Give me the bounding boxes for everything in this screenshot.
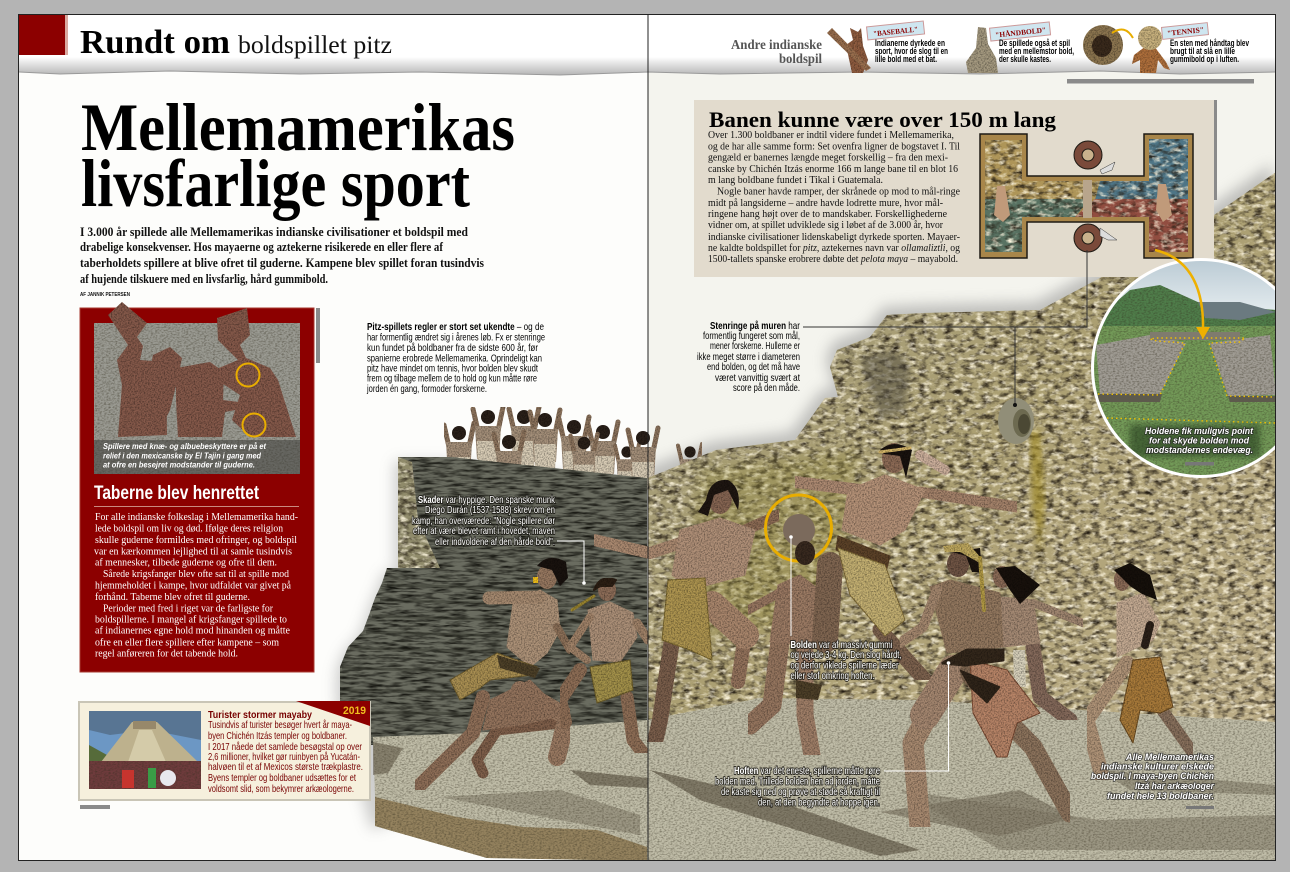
panel body text: indianske civilisationer lidenskabeligt dyrkede sporten. Mayaer- — [708, 232, 960, 243]
caption: ball courts in Chichén Itzá: Alle Mellemamerikas — [1125, 752, 1214, 763]
panel body text: Perioder med fred i riget var de farligste for — [103, 604, 273, 615]
callout: stone rings: Stenringe på muren har — [710, 320, 800, 332]
text: baseball — [875, 38, 948, 65]
caption: ball courts in Chichén Itzá: boldspil. I maya-byen Chichén — [1091, 771, 1214, 782]
callout: injuries: efter at være blevet ramt i hovedet, maven — [413, 525, 555, 537]
intro text — [80, 225, 484, 286]
panel body text: ringene hang højt over de to mandskaber. Forskellighederne — [708, 209, 947, 220]
photo caption: for at skyde bolden mod — [1149, 436, 1249, 446]
panel body text: vidner om, at spillet udviklede sig i løbet af de 3.000 år, hvor — [708, 220, 943, 231]
panel body text: ofre en eller flere spillere efter kampene – som — [95, 638, 279, 649]
box body text: Byens templer og boldbaner udsættes for et — [208, 772, 356, 784]
text: tennis: brugt til at slå en lille — [1170, 46, 1235, 57]
panel: other ball games — [731, 21, 1249, 73]
icon: stone ring on the wall — [998, 398, 1034, 444]
panel body text — [94, 512, 298, 660]
text: pitz rules: spanierne erobrede Mellemamerika. Oprindeligt kan — [367, 353, 542, 365]
box body text: halvøen til et af Mexicos største trækplastre. — [208, 761, 363, 773]
text: tennis — [1170, 38, 1249, 65]
intro text: drabelige konsekvenser. Hos mayaerne og aztekerne risikerede en eller flere af — [80, 240, 444, 254]
photo caption — [1145, 426, 1254, 456]
photo marker bar — [1185, 462, 1214, 466]
text: pitz rules: har formentlig ændret sig i årenes løb. Fx er stenringe — [367, 332, 545, 344]
heading: other games — [731, 38, 822, 67]
box heading: Turister stormer mayaby — [208, 709, 312, 721]
photo caption: Holdene fik muligvis point — [1145, 426, 1254, 437]
panel body text: og de har alle samme form: Set ovenfra ligner de bogstavet I. Til — [708, 142, 960, 153]
heading: other games: boldspil — [779, 52, 822, 67]
main title: Mellemamerikas — [81, 89, 515, 165]
callout: injuries: Skader var hyppige. Den spanske munk — [418, 494, 556, 506]
box body text: Tusindvis af turister besøger hvert år maya- — [208, 719, 352, 731]
text: baseball: lille bold med et bat. — [875, 54, 937, 65]
heading: other games: Andre indianske — [731, 38, 822, 53]
marker bar beside panel — [316, 308, 320, 363]
panel: losers executed — [80, 302, 314, 672]
caption: ball courts in Chichén Itzá: indianske kulturer elskede — [1101, 762, 1215, 772]
stone wall, right — [648, 172, 1276, 740]
callout: injuries: eller indvoldene af den hårde bold". — [435, 536, 555, 548]
label: handball — [990, 22, 1051, 41]
callout: ball: og vejede 3-4 kg. Den slog hårdt, — [790, 649, 902, 661]
panel body text: af indianernes egne hold mod hinanden og måtte — [95, 626, 290, 637]
panel heading: Banen kunne være over 150 m lang — [709, 107, 1056, 132]
callout: ball: og derfor viklede spillerne læder — [790, 660, 899, 672]
crowd on the wall — [444, 407, 702, 494]
header band with torn edge — [19, 15, 1275, 75]
ring: knee protector — [236, 364, 260, 386]
panel: tourists 2019 — [79, 701, 370, 800]
page marker bar — [1067, 79, 1254, 84]
panel body text: m lang boldbane fundet i Tikal i Guatemala. — [708, 175, 883, 186]
callout: stone rings: score på den måde. — [733, 382, 800, 394]
intro text: taberholdets spillere at blive ofret til guderne. Kampene blev spillet foran tusindvis — [80, 256, 484, 270]
photo caption: at ofre en besejret modstander til guderne. — [103, 460, 255, 470]
callout: stone rings: været vanvittig svært at — [715, 372, 800, 384]
panel body text: ne kaldte boldspillet for pitz, aztekernes navn var ollamaliztli, og — [708, 243, 961, 254]
circle: upper ring — [1074, 141, 1115, 174]
panel body text: Over 1.300 boldbaner er indtil videre fundet i Mellemamerika, — [708, 130, 954, 141]
marker bar under box — [80, 805, 110, 809]
box body text — [208, 719, 363, 795]
label: tennis: "TENNIS" — [1167, 25, 1204, 38]
callout: stone rings: end bolden, og det må have — [707, 361, 800, 373]
photo caption: relief i den mexicanske by El Tajin i gang med — [103, 452, 262, 460]
callout: stone rings — [697, 250, 1087, 407]
section heading: boldspillet pitz — [238, 32, 392, 59]
player: right player — [1087, 563, 1193, 780]
panel body text: skulle guderne formildes med ofringer, og boldspil — [95, 535, 297, 546]
caption: ball courts in Chichén Itzá — [1091, 752, 1215, 809]
text: handball: der skulle kastes. — [999, 54, 1051, 65]
callout: ball: Bolden var af massivt gummi — [790, 639, 892, 651]
photo: pyramid with crowd — [89, 711, 201, 789]
panel body text: For alle indianske folkeslag i Mellemamerika hand- — [95, 512, 298, 523]
intro text: I 3.000 år spillede alle Mellemamerikas indianske civilisationer et boldspil med — [80, 225, 468, 239]
ball — [766, 495, 832, 561]
photo: aerial view of ball court — [1091, 258, 1275, 478]
callout: hip: bolden med. Trillede bolden hen ad jorden, måtte — [715, 776, 880, 788]
label: baseball: "BASEBALL" — [873, 25, 919, 38]
byline: AF JANNIK PETERSEN — [80, 292, 130, 298]
callout: ball — [789, 535, 902, 682]
panel body text: canske by Chichén Itzás enorme 166 m lange bane til en blot 16 — [708, 164, 958, 175]
box body text: 2,6 millioner, hvilket gør ruinbyen på Yucatán- — [208, 751, 360, 763]
callout: injuries — [412, 494, 586, 585]
year: 2019 — [343, 705, 366, 717]
panel body text: 1500-tallets spanske erobrere døbte det pelota maya – mayabold. — [708, 254, 958, 265]
caption: ball courts in Chichén Itzá: fundet hele 13 boldbaner. — [1107, 791, 1214, 802]
text: tennis: gummibold op i luften. — [1170, 54, 1239, 65]
arrow: codex to photo — [1155, 250, 1210, 339]
panel body text: boldspillerne. I mangel af krigsfanger spillede to — [95, 615, 287, 626]
label: baseball — [867, 21, 925, 40]
text: pitz rules — [366, 321, 545, 395]
text: pitz rules: Pitz-spillets regler er stort set ukendte – og de — [367, 321, 544, 333]
text: pitz rules: kun fundet på boldbaner fra de sidste 600 år, før — [367, 342, 538, 354]
panel: court length — [694, 100, 1214, 278]
corner flag — [296, 701, 370, 726]
callout: stone rings: mener forskerne. Hullerne er — [710, 340, 800, 352]
main title: livsfarlige sport — [81, 145, 470, 221]
label: tennis — [1161, 23, 1209, 39]
text: baseball: sport, hvor de slog til en — [875, 46, 948, 57]
callout: hip: Hoften var det eneste, spillerne måtte røre — [734, 765, 880, 777]
ground — [373, 698, 1276, 861]
icon: tennis figurine — [1132, 26, 1170, 73]
earth edge — [375, 797, 647, 861]
text: tennis: En sten med håndtag blev — [1170, 38, 1249, 49]
player: second runner — [560, 578, 648, 753]
illustration: ball court scene — [336, 164, 1276, 861]
player: small player behind — [748, 541, 822, 755]
panel body text: gengæld er banernes længde meget forskellig – fra den mexi- — [708, 153, 948, 164]
panel body text: hjemmeholdet i kampe, hvor udfaldet var givet på — [95, 581, 291, 592]
panel body text: midt på langsiderne – andre havde lodrette mure, hvor mål- — [708, 198, 943, 209]
player: foreground player — [900, 543, 1070, 827]
callout: hip — [715, 661, 950, 808]
caption marker bar — [1186, 806, 1214, 809]
callout: hip: den, at den begyndte at hoppe igen. — [758, 796, 880, 808]
player: leaping player — [795, 443, 1017, 680]
panel body text: Sårede krigsfanger blev ofte sat til at spille mod — [103, 569, 290, 580]
icon: baseball figurine — [827, 28, 871, 73]
box body text: byen Chichén Itzás templer og boldbaner. — [208, 730, 347, 742]
ring: ball highlight — [766, 495, 832, 561]
icon: handball figurine — [966, 27, 998, 73]
text: handball: med en mellemstor bold, — [999, 46, 1074, 57]
panel body text: var en kærkommen lejlighed til at samle tusindvis — [94, 546, 292, 558]
photo caption: modstandernes endevæg. — [1146, 445, 1253, 456]
panel heading: Taberne blev henrettet — [94, 483, 260, 504]
player: foreground woman behind — [993, 566, 1083, 720]
circle: lower ring — [1074, 224, 1117, 252]
text: handball — [999, 38, 1074, 65]
callout: injuries: Diego Durán (1537-1588) skrev om en — [425, 504, 555, 516]
section heading — [80, 24, 392, 61]
callout: stone rings: ikke meget større i diameteren — [697, 351, 800, 363]
ring: elbow protector — [242, 414, 266, 436]
photo caption: Spillere med knæ- og albuebeskyttere er på et — [103, 442, 266, 451]
red header block — [19, 15, 65, 55]
panel body text — [708, 130, 961, 265]
text: pitz rules: pitz have mindet om tennis, hvor bolden blev skudt — [367, 363, 538, 375]
main title — [81, 89, 515, 221]
text: handball: De spillede også et spil — [999, 38, 1070, 49]
callout: stone rings: formentlig fungeret som mål, — [703, 330, 800, 342]
label: handball: "HÅNDBOLD" — [995, 25, 1046, 40]
player: left runner — [415, 558, 570, 790]
photo: El Tajin relief — [94, 302, 300, 474]
intro text: af hujende tilskuere med en livsfarlig, hård gummibold. — [80, 272, 328, 286]
panel body text: Nogle baner havde ramper, der skrånede op mod to mål-ringe — [717, 186, 960, 198]
photo caption — [103, 442, 266, 470]
text: baseball: Indianerne dyrkede en — [875, 38, 945, 49]
section heading: Rundt om — [80, 24, 230, 61]
panel body text: af mennesker, tilbede guderne og ofre til dem. — [95, 558, 277, 569]
marker bar beside panel — [1214, 100, 1217, 200]
box body text: voldsomt slid, som bekymrer arkæologerne. — [208, 783, 354, 795]
text: pitz rules: frem og tilbage mellem de to hold og kun måtte røre — [367, 373, 537, 385]
text: pitz rules: jorden én gang, formoder forskerne. — [366, 383, 487, 395]
header stripe — [65, 15, 68, 55]
box body text: I 2017 nåede det samlede besøgstal op over — [208, 741, 362, 753]
callout: injuries: kamp, han overværede: "Nogle spillere dør — [412, 515, 555, 527]
callout: hip: de kaste sig ned og prøve at støde så kraftigt til — [721, 786, 880, 798]
panel body text: lede boldspil om liv og død. Ifølge deres religion — [95, 524, 284, 535]
callout: ball: eller stof omkring hoften. — [790, 670, 874, 682]
panel body text: forhånd. Taberne blev ofret til guderne. — [95, 592, 250, 603]
player: centre jumper — [594, 480, 779, 742]
arrow: racket to figure — [1112, 29, 1133, 38]
icon: stone racket — [1083, 25, 1123, 65]
illustration: codex ball court — [980, 134, 1193, 258]
caption: ball courts in Chichén Itzá: Itzá har arkæologer — [1135, 781, 1215, 792]
stairs, left — [340, 457, 647, 745]
panel body text: regel anføreren for det tabende hold. — [95, 649, 238, 660]
